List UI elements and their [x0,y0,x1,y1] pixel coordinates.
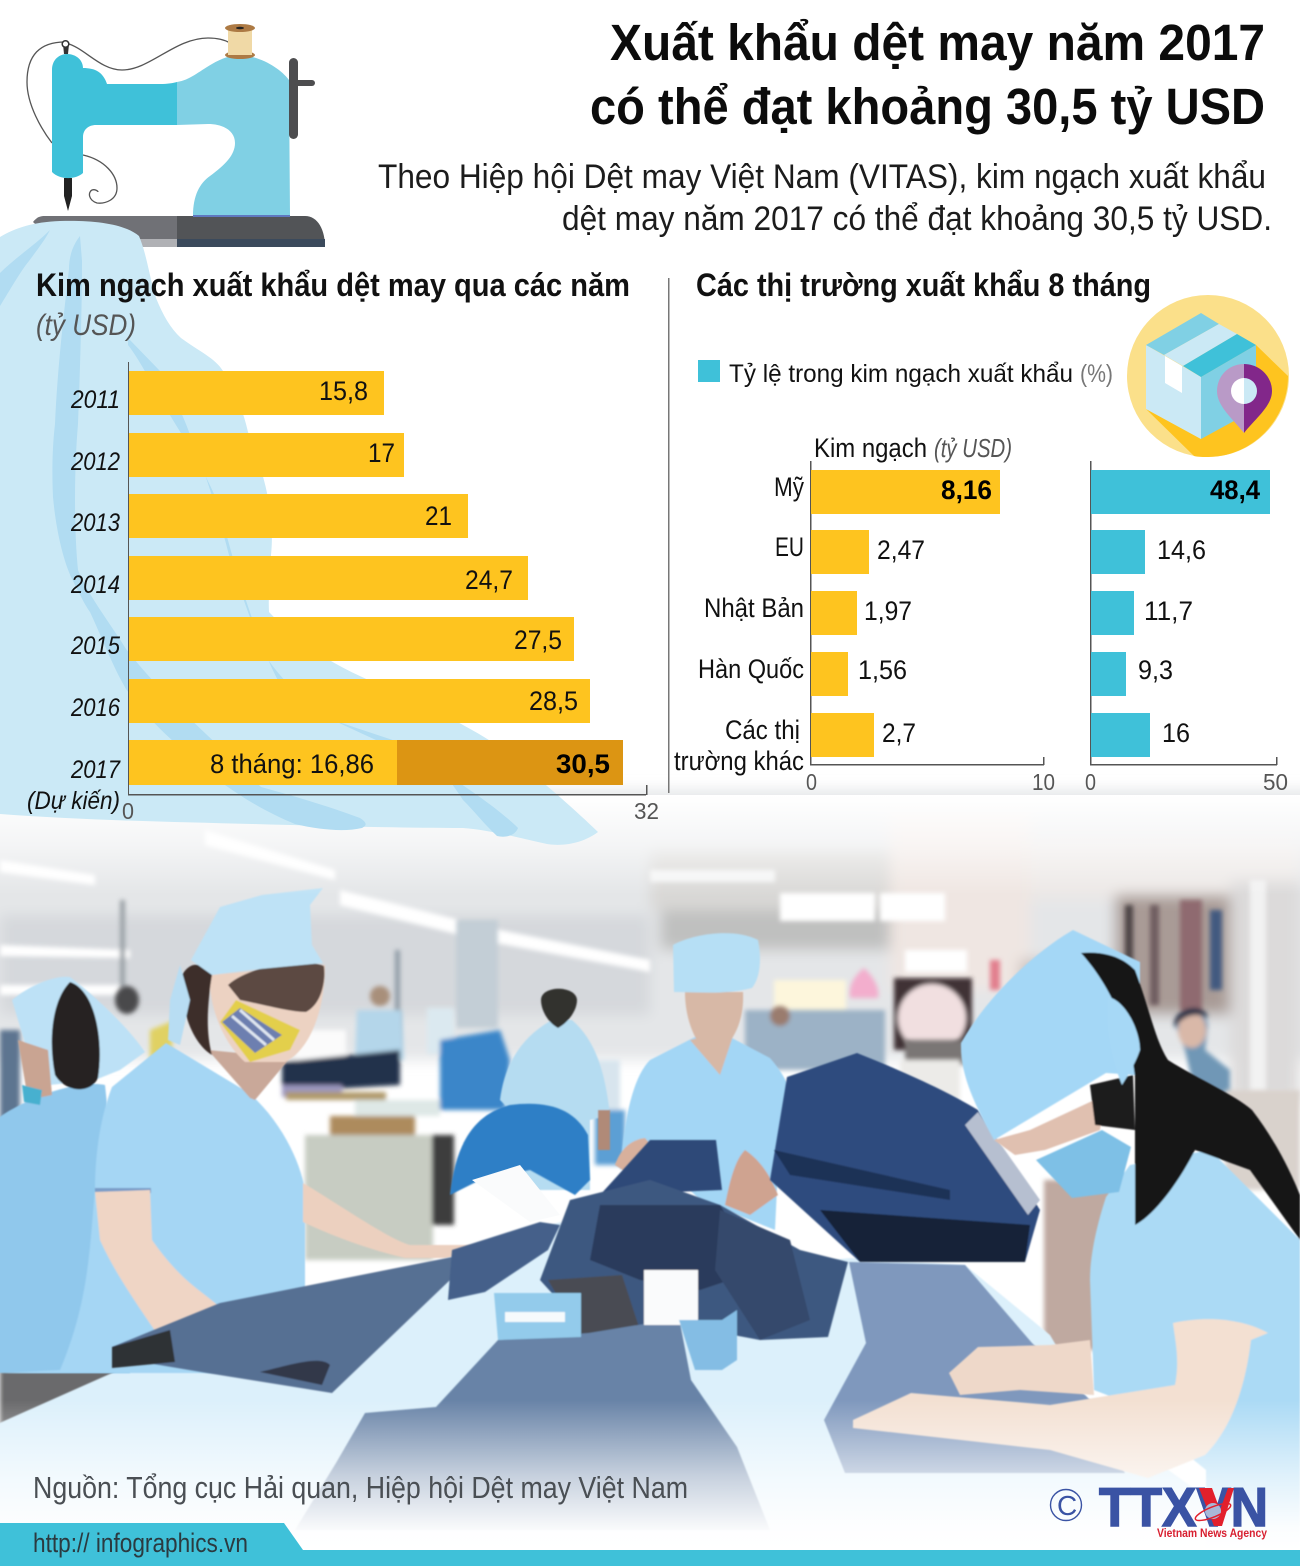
bar chart: share by market [1085,461,1288,795]
bar chart: export value 2011-2017 [27,362,659,824]
legend: share of export value: (%) [1080,360,1113,388]
bar chart: export value by market: 8,16 [941,475,992,505]
bar chart: export value 2011-2017: 28,5 [529,686,578,716]
base plate [33,216,177,247]
worker: woman at right with cap and surgical mask [853,930,1300,1560]
worker: far left [0,977,145,1373]
bar chart: export value 2011-2017: 2012 [70,448,120,476]
heading: export value by year: (tỷ USD) [36,309,136,342]
thread [27,38,230,203]
background photo: garment factory workers [0,790,1300,1566]
photo: work table [0,1222,1300,1566]
bar chart: export value by market: 10 [1032,769,1055,795]
photo: blue fabric pile [450,1104,590,1195]
bar chart: export value 2011-2017: 8 tháng: 16,86 [210,749,374,779]
photo top fade [0,795,1300,895]
source note: Nguồn: Tổng cục Hải quan, Hiệp hội Dệt may Việt Nam [33,1470,688,1505]
photo: work floor mid-ground [0,986,1300,1430]
bar chart: export value by market: trường khác [674,746,804,776]
title: Xuất khẩu dệt may năm 2017 [610,14,1265,71]
title: có thể đạt khoảng 30,5 tỷ USD [590,78,1265,135]
bar chart: export value by market: Mỹ [774,472,804,502]
icon: parcel with location pin [1127,295,1289,457]
heading: export value by year [36,267,630,342]
bar chart: export value 2011-2017: 27,5 [514,625,562,655]
machine body: light blue [177,55,290,216]
needle [64,178,72,211]
subtitle [378,158,1272,238]
bar chart: export value by market: 2,7 [882,718,916,748]
bar chart: share by market: 14,6 [1157,535,1206,565]
fabric folds [0,230,518,837]
title [590,14,1265,135]
bar chart: export value 2011-2017: 32 [634,798,659,824]
heading: export value by year: Kim ngạch xuất khẩu dệt may qua các năm [36,267,630,303]
bar chart: share by market: 0 [1085,769,1096,795]
vertical divider [668,278,670,793]
footer bar with website: http:// infographics.vn [33,1528,248,1558]
worker: woman with striped mask [0,888,482,1373]
legend: share of export value: Tỷ lệ trong kim ngạch xuất khẩu [729,360,1073,388]
thread guide [63,44,69,54]
spool [225,51,255,59]
photo: factory hall background [0,790,1300,1100]
bar chart: export value 2011-2017: 2016 [70,694,120,722]
bar chart: share by market: 50 [1263,769,1288,795]
machine arm: teal [52,54,177,178]
bar chart: export value by market: Hàn Quốc [698,654,804,684]
bar chart: export value 2011-2017: 0 [122,798,134,824]
icon: sewing machine [27,24,325,247]
bar chart: export value 2011-2017: 2015 [70,632,120,660]
worker: woman at centre [615,933,795,1230]
bar chart: export value by market: 2,47 [877,535,925,565]
bar chart: export value by market: (tỷ USD) [934,433,1012,463]
photo: ceiling lights, windows and columns [0,830,1266,1100]
bar chart: export value 2011-2017: 2013 [70,509,120,537]
bar chart: export value by market: Các thị [725,715,800,745]
bar chart: export value 2011-2017: 2017 [70,756,121,784]
bar chart: share by market: 9,3 [1138,655,1173,685]
logo: TTXVN Vietnam News Agency: Vietnam News Agency [1157,1526,1267,1540]
bar chart: share by market: 48,4 [1210,475,1260,505]
photo bottom fade [0,1400,1300,1550]
bar chart: export value by market: Kim ngạch [814,433,927,463]
footer bar with website [0,1523,1300,1566]
hand wheel [289,58,298,139]
bar chart: export value 2011-2017: 2014 [70,571,120,599]
bar chart: export value by market [674,433,1055,795]
bar chart: export value by market: 0 [806,769,817,795]
bar chart: export value 2011-2017: 17 [368,438,395,468]
bar chart: export value 2011-2017: 2011 [70,386,120,414]
bar chart: share by market: 16 [1162,718,1190,748]
photo: paper on pile [472,1165,560,1222]
bar chart: export value 2011-2017: 24,7 [465,565,513,595]
bar chart: export value by market: Nhật Bản [704,593,804,623]
logo: TTXVN Vietnam News Agency: C [1057,1490,1077,1521]
bar chart: export value 2011-2017: (Dự kiến) [27,787,120,815]
bar chart: export value 2011-2017: 15,8 [319,376,368,406]
bar chart: export value by market: 1,97 [864,596,912,626]
bar chart: export value 2011-2017: 21 [425,501,452,531]
bar chart: export value by market: 1,56 [858,655,907,685]
fabric drape [0,221,598,845]
bar chart: export value by market: EU [775,532,804,562]
heading: export markets: Các thị trường xuất khẩu 8 tháng [696,267,1151,303]
bar chart: export value 2011-2017: 30,5 [556,749,610,779]
photo: man with back turned [500,989,610,1190]
garments: folded dark stacks [112,1053,1125,1530]
bar chart: share by market: 11,7 [1144,596,1193,626]
logo: TTXVN Vietnam News Agency: TTXVN [1099,1476,1268,1538]
